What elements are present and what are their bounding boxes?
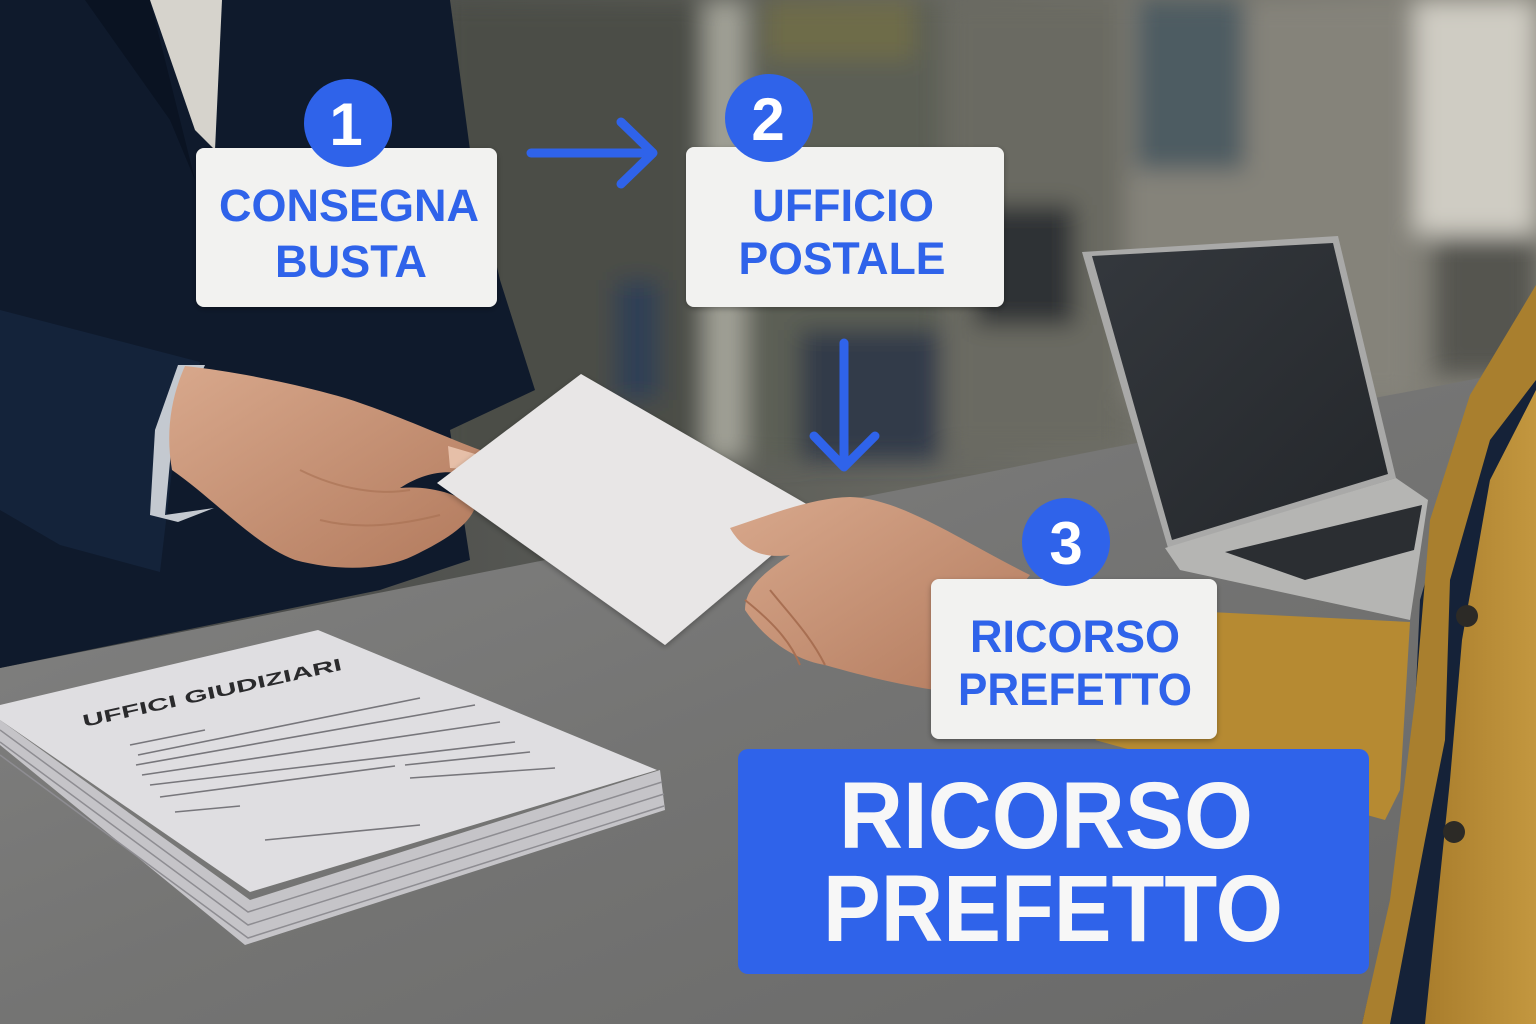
step 1 box: consegna busta: BUSTA — [275, 236, 427, 287]
step 1 box: consegna busta: CONSEGNA — [219, 180, 479, 231]
arrow 2 to 3 — [814, 343, 875, 467]
person right: mustard cardigan — [1095, 285, 1536, 1024]
laptop — [1082, 236, 1428, 620]
desk counter — [0, 378, 1536, 1024]
step 1 box: consegna busta — [196, 148, 497, 307]
step 2 box: ufficio postale: POSTALE — [738, 233, 946, 284]
step 3 box: ricorso prefetto: PREFETTO — [958, 664, 1192, 715]
step 2 box: ufficio postale: UFFICIO — [752, 180, 934, 231]
step 3 box: ricorso prefetto: RICORSO — [970, 611, 1180, 662]
person left: dark suit — [0, 0, 535, 668]
step 1 badge: 1 — [329, 91, 363, 158]
document heading: UFFICI GIUDIZIARI — [81, 655, 344, 731]
document stack — [0, 630, 665, 945]
step 3 box: ricorso prefetto — [931, 579, 1217, 739]
step 2 badge: 2 — [751, 86, 785, 153]
right hand — [730, 497, 1030, 690]
arrow 1 to 2 — [531, 122, 653, 184]
step 2 badge — [725, 74, 813, 162]
envelope — [437, 374, 822, 645]
main banner: ricorso prefetto: RICORSO — [839, 763, 1253, 869]
step 2 box: ufficio postale — [686, 147, 1004, 307]
main banner: ricorso prefetto: PREFETTO — [823, 856, 1283, 962]
step 1 badge — [304, 79, 392, 167]
left hand — [169, 366, 483, 568]
step 3 badge — [1022, 498, 1110, 586]
step 3 badge: 3 — [1049, 510, 1083, 577]
main banner: ricorso prefetto — [738, 749, 1369, 974]
